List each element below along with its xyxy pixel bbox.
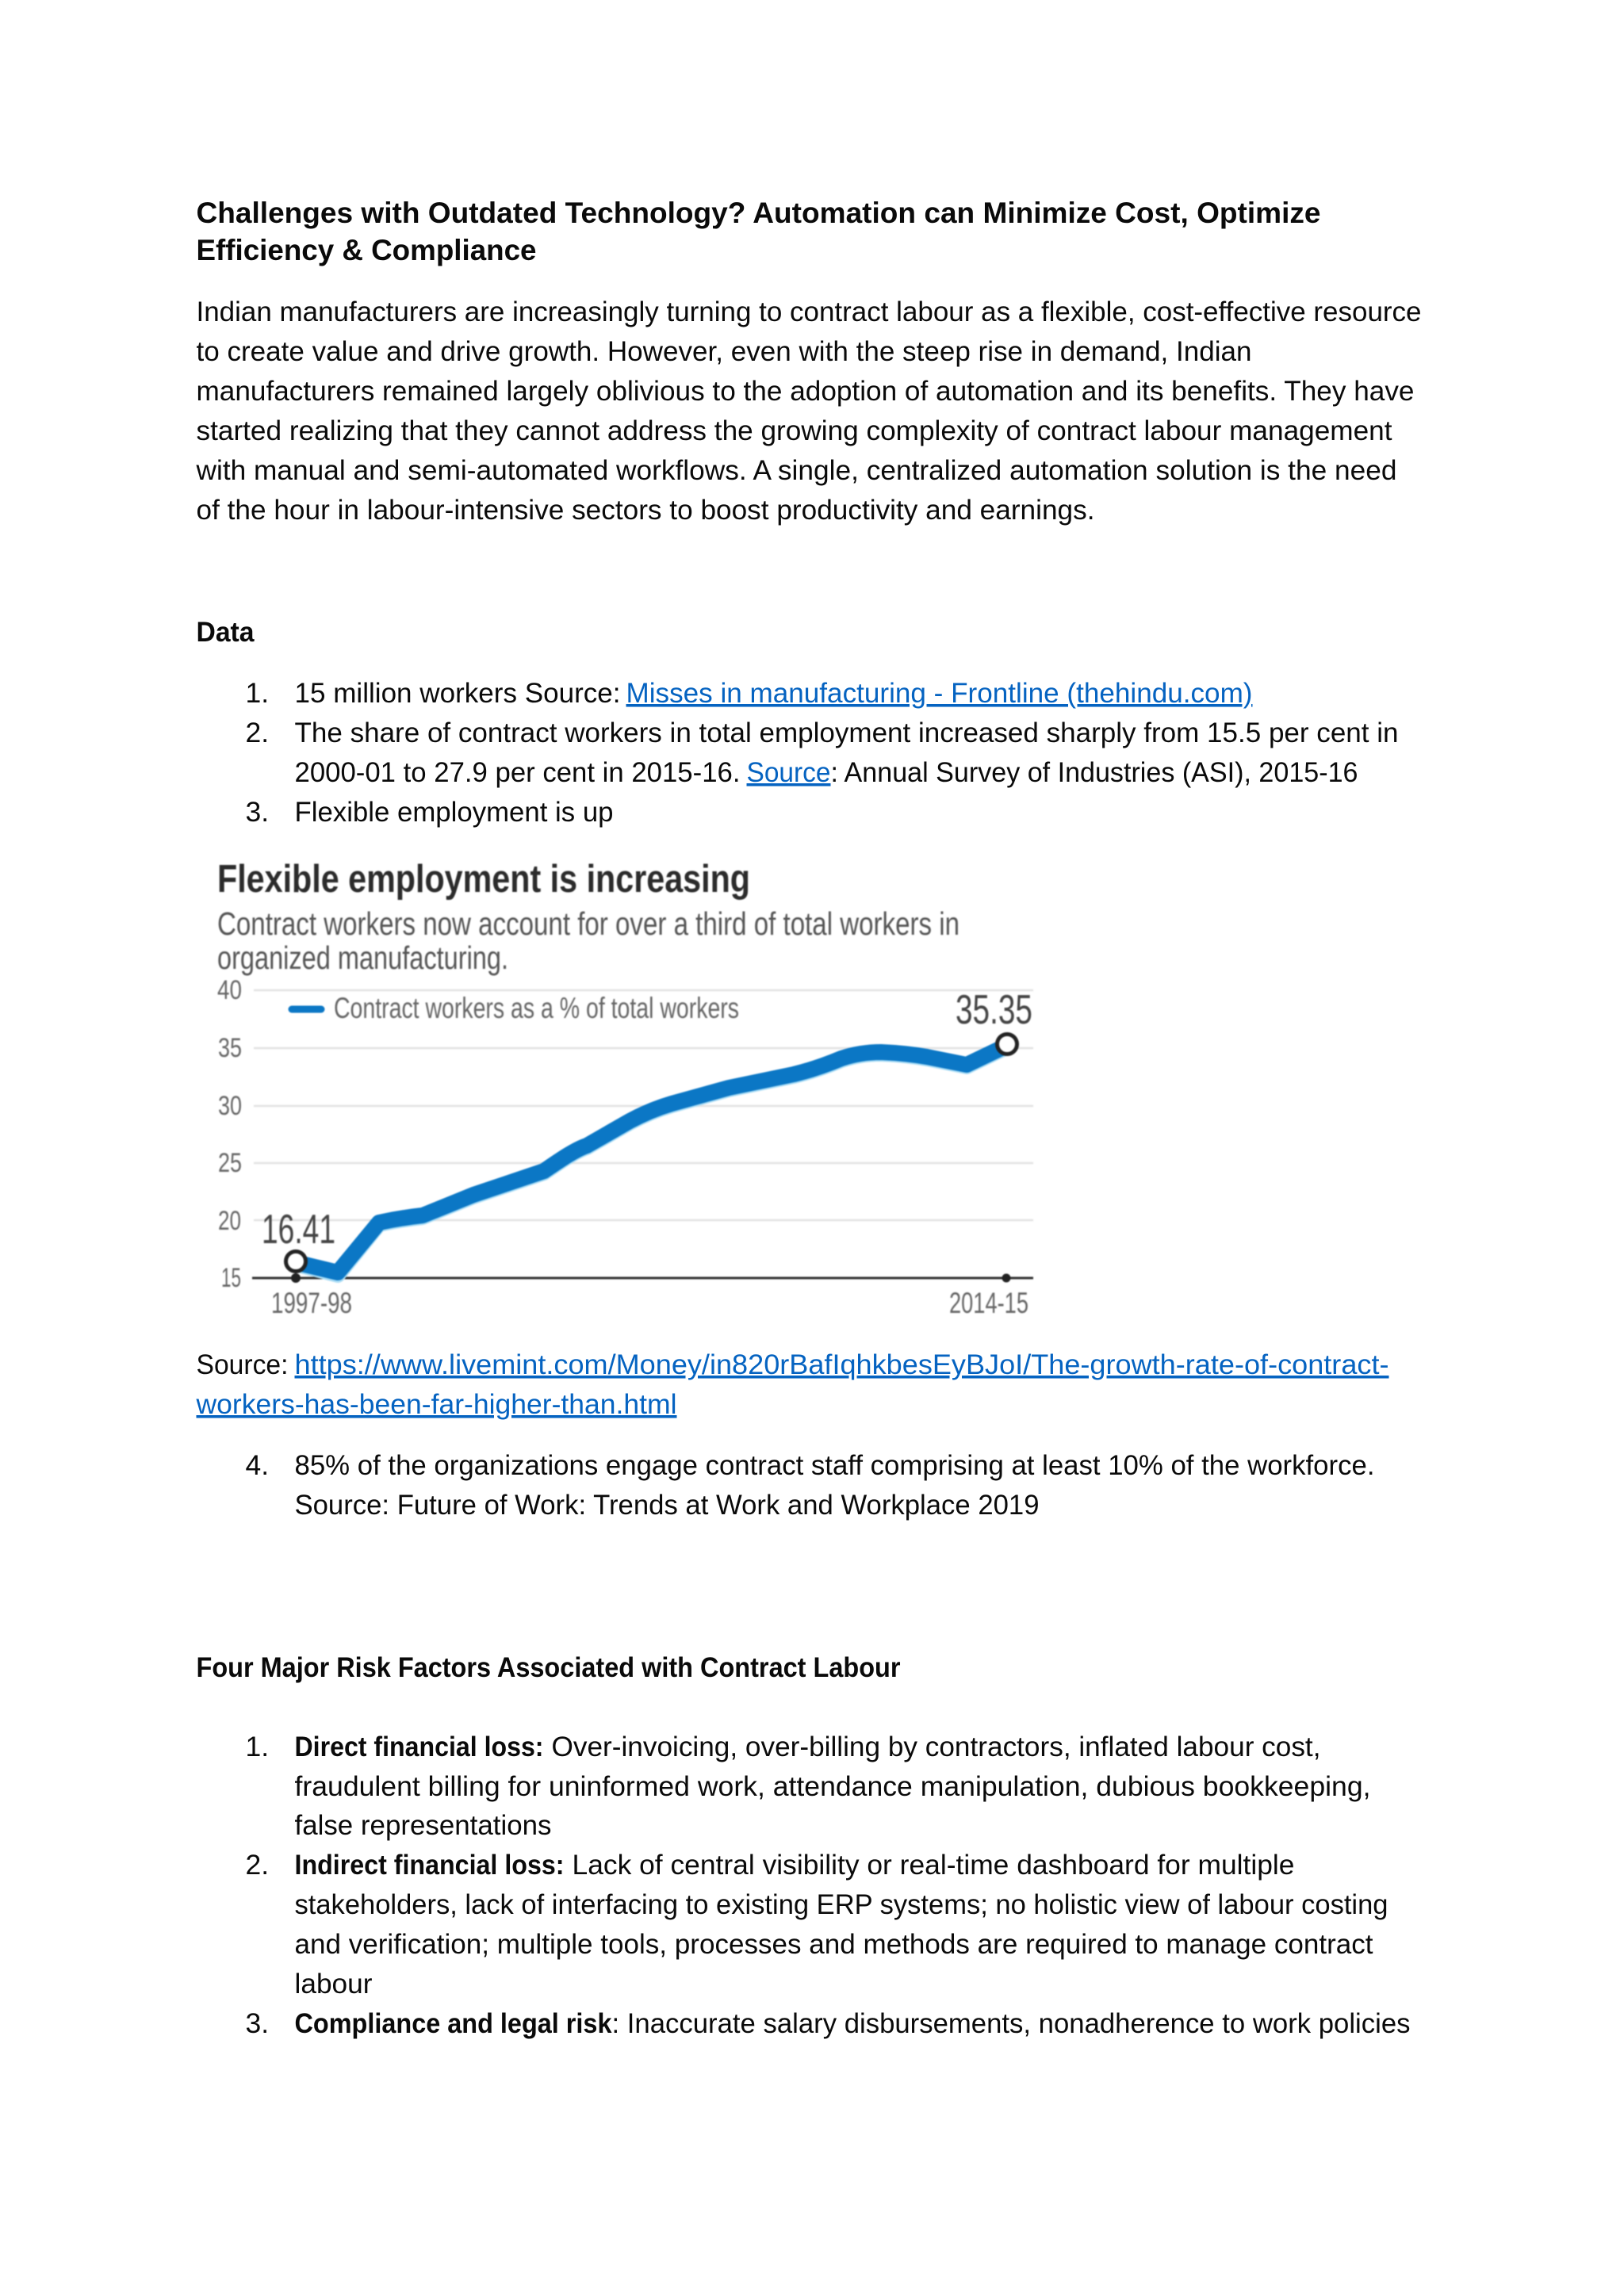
y axis labels	[217, 975, 242, 1293]
chart subtitle: organized manufacturing.	[217, 939, 508, 976]
data list items 1 to 3: Misses in manufacturing - Frontline (thehindu.com)	[626, 677, 1253, 709]
chart source	[195, 1349, 1389, 1420]
start value: 16.41	[262, 1207, 335, 1253]
risk 2: indirect financial loss: 2.	[246, 1849, 269, 1881]
data list items 1 to 3: : Annual Survey of Industries (ASI), 2015-16	[831, 756, 1358, 788]
risk list	[246, 1731, 1410, 2039]
start marker	[285, 1251, 306, 1283]
risk 2: indirect financial loss	[246, 1849, 1388, 1999]
risk 1: direct financial loss: false representations	[295, 1809, 552, 1841]
end value: 35.35	[956, 987, 1032, 1033]
intro paragraph: manufacturers remained largely oblivious to the adoption of automation and its benefits. They have	[197, 375, 1415, 407]
chart subtitle	[217, 905, 959, 976]
y axis labels: 25	[218, 1148, 242, 1178]
chart source: workers-has-been-far-higher-than.html	[195, 1388, 677, 1420]
risk 3: compliance and legal risk: Compliance and legal risk	[295, 2007, 612, 2039]
intro paragraph	[196, 296, 1421, 526]
intro paragraph: Indian manufacturers are increasingly turning to contract labour as a flexible, cost-effective resource	[197, 296, 1421, 327]
heading: risk factors: Four Major Risk Factors Associated with Contract Labour	[197, 1651, 901, 1683]
risk 3: compliance and legal risk: : Inaccurate salary disbursements, nonadherence to work policies	[612, 2007, 1410, 2039]
y axis labels: 35	[218, 1033, 242, 1063]
data list items 1 to 3: Flexible employment is up	[295, 796, 614, 828]
data list item 4: 4.	[246, 1449, 269, 1481]
data list item 4	[246, 1449, 1375, 1521]
end marker	[998, 1034, 1017, 1283]
risk 1: direct financial loss: Over-invoicing, over-billing by contractors, inflated labour cost,	[552, 1731, 1321, 1762]
risk 1: direct financial loss	[246, 1731, 1371, 1841]
heading: data: Data	[197, 616, 255, 648]
data list items 1 to 3: 1.	[246, 677, 269, 709]
data list items 1 to 3	[246, 677, 1399, 828]
title: Challenges with Outdated Technology? Automation can Minimize Cost, Optimize	[197, 197, 1321, 229]
chart subtitle: Contract workers now account for over a third of total workers in	[217, 905, 959, 942]
risk 2: indirect financial loss: Indirect financial loss:	[295, 1849, 565, 1881]
chart: flexible employment	[217, 858, 1033, 1319]
y axis labels: 20	[218, 1206, 241, 1236]
intro paragraph: started realizing that they cannot address the growing complexity of contract labour management	[197, 415, 1392, 446]
title	[197, 197, 1321, 266]
title: Efficiency & Compliance	[197, 234, 536, 266]
intro paragraph: of the hour in labour-intensive sectors to boost productivity and earnings.	[197, 494, 1094, 526]
y axis labels: 40	[217, 975, 242, 1005]
data list item 4: Source: Future of Work: Trends at Work and Workplace 2019	[295, 1489, 1039, 1521]
risk 3: compliance and legal risk: 3.	[246, 2007, 269, 2039]
data list items 1 to 3: 15 million workers Source:	[295, 677, 620, 709]
x label start: 1997-98	[271, 1287, 352, 1319]
data list items 1 to 3: 3.	[246, 796, 269, 828]
data list item 4: 85% of the organizations engage contract staff comprising at least 10% of the workforce.	[295, 1449, 1375, 1481]
data list items 1 to 3: Source	[747, 756, 831, 788]
risk 2: indirect financial loss: labour	[295, 1968, 373, 1999]
risk 3: compliance and legal risk	[246, 2007, 1410, 2039]
gridlines	[254, 990, 1033, 1220]
x label end: 2014-15	[949, 1287, 1028, 1319]
intro paragraph: with manual and semi-automated workflows. A single, centralized automation solution is the need	[196, 454, 1396, 486]
risk 2: indirect financial loss: stakeholders, lack of interfacing to existing ERP systems; no holistic view of labour costing	[295, 1888, 1388, 1920]
intro paragraph: to create value and drive growth. However, even with the steep rise in demand, Indian	[197, 335, 1251, 367]
risk 1: direct financial loss: Direct financial loss:	[295, 1731, 544, 1762]
risk 2: indirect financial loss: and verification; multiple tools, processes and methods are required to manage contract	[295, 1928, 1373, 1960]
legend: Contract workers as a % of total workers	[334, 992, 739, 1024]
y axis labels: 30	[218, 1091, 242, 1121]
data list items 1 to 3: 2000-01 to 27.9 per cent in 2015-16.	[295, 756, 741, 788]
x axis	[252, 1276, 1033, 1280]
risk 1: direct financial loss: fraudulent billing for uninformed work, attendance manipulation, dubious bookkeeping,	[295, 1770, 1371, 1802]
risk 2: indirect financial loss: Lack of central visibility or real-time dashboard for multiple	[573, 1849, 1294, 1881]
chart source: https://www.livemint.com/Money/in820rBafIqhkbesEyBJoI/The-growth-rate-of-contract-	[295, 1349, 1389, 1380]
risk 1: direct financial loss: 1.	[246, 1731, 269, 1762]
chart title: Flexible employment is increasing	[217, 858, 750, 901]
data list items 1 to 3: 2.	[246, 717, 269, 748]
chart source: Source:	[197, 1349, 289, 1380]
data line	[295, 1046, 1006, 1275]
y axis labels: 15	[221, 1263, 241, 1293]
data list items 1 to 3: The share of contract workers in total employment increased sharply from 15.5 per cent in	[295, 717, 1399, 748]
